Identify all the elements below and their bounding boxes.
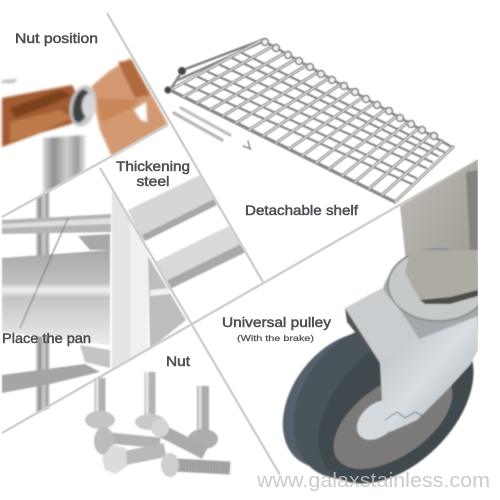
vertical bolts bbox=[94, 378, 106, 418]
text: universal pulley: Universal pulley bbox=[222, 314, 331, 330]
collar bbox=[382, 277, 478, 340]
text: place the pan: Place the pan bbox=[2, 330, 91, 346]
text: detachable shelf: Detachable shelf bbox=[245, 202, 358, 218]
image: nuts and bolts bbox=[85, 372, 230, 477]
loose rods bbox=[174, 113, 222, 140]
lying bolts bbox=[110, 438, 160, 443]
text: steel: steel bbox=[136, 173, 170, 189]
loop ends bbox=[262, 39, 437, 139]
text: nut position: Nut position bbox=[15, 30, 98, 46]
wheel tread bbox=[282, 334, 350, 466]
text: nut: Nut bbox=[166, 353, 190, 369]
watermark: www.galaxstainless.com bbox=[256, 470, 490, 492]
panel: thickening steel bands bbox=[128, 175, 246, 290]
casters on shelf bbox=[178, 67, 186, 75]
wires bbox=[170, 40, 453, 202]
text: thickening steel: Thickening bbox=[116, 158, 190, 174]
panel: place the pan photo bbox=[2, 190, 186, 414]
text: with the brake: (With the brake) bbox=[237, 333, 314, 343]
wheel face bbox=[319, 352, 475, 485]
image: universal pulley caster bbox=[282, 160, 478, 485]
panel: nut position photo bbox=[2, 58, 168, 194]
bracket bbox=[345, 288, 420, 363]
image: detachable wire shelf bbox=[164, 39, 453, 202]
